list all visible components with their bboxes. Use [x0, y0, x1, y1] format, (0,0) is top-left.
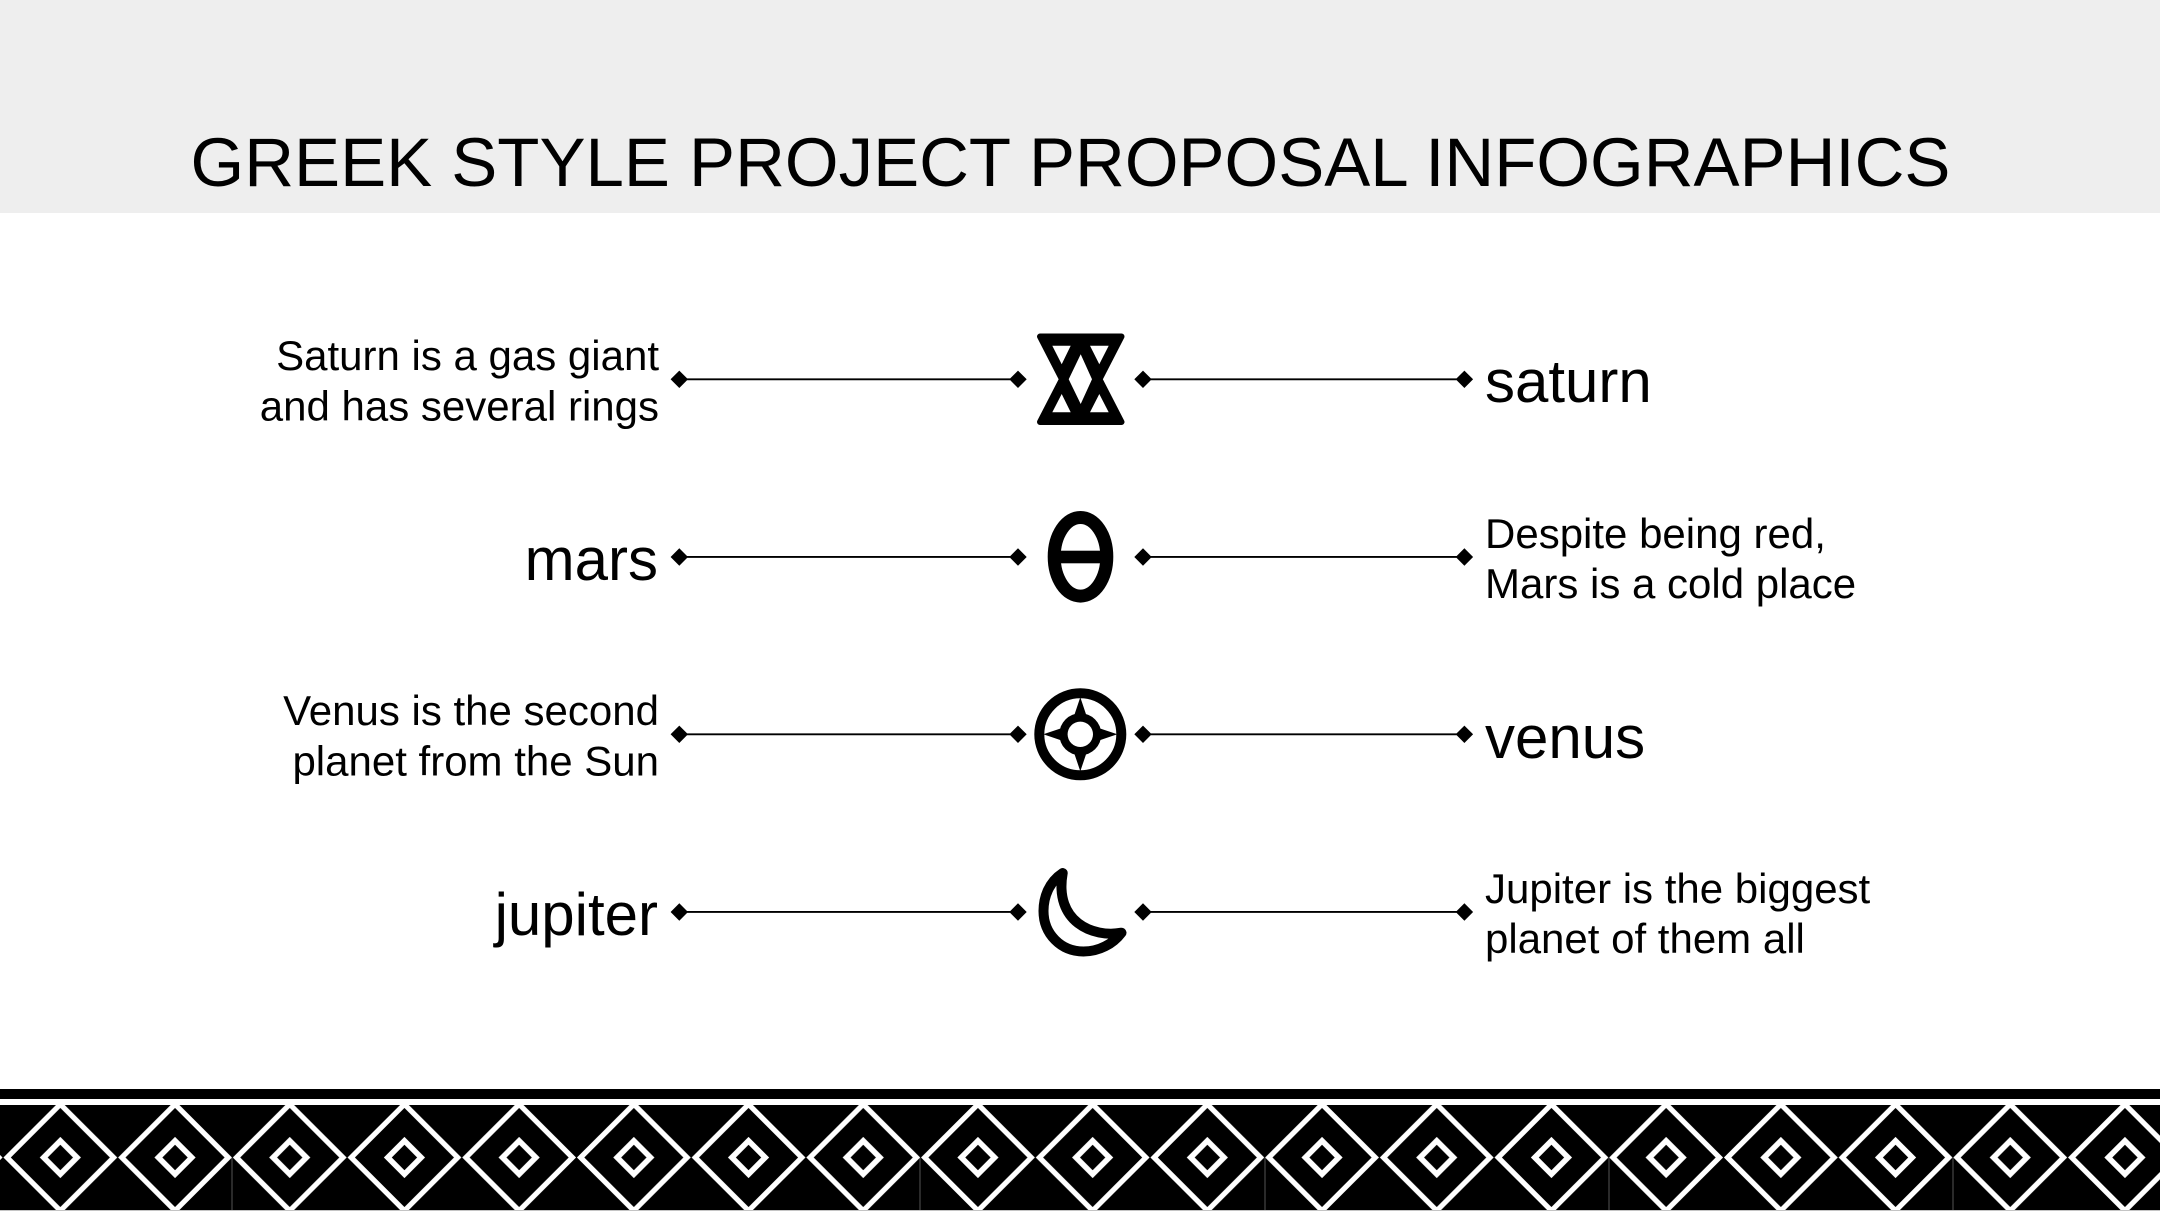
connector left: saturn	[671, 371, 1027, 388]
connector right: jupiter	[1134, 903, 1473, 921]
description: saturn: Saturn is a gas giant	[276, 332, 659, 379]
icon: compass	[1039, 693, 1121, 775]
description: venus: Venus is the second	[283, 687, 659, 734]
icon: crescent moon	[1044, 873, 1122, 952]
connector right: saturn	[1134, 371, 1473, 388]
description: mars: Despite being red,	[1485, 510, 1826, 557]
description: saturn: and has several rings	[260, 382, 659, 429]
connector left: venus	[671, 726, 1027, 743]
icon: theta	[1050, 518, 1111, 596]
description: venus: planet from the Sun	[292, 737, 659, 784]
label: jupiter: jupiter	[493, 881, 658, 948]
icon: hourglass	[1040, 336, 1122, 422]
connector left: jupiter	[671, 903, 1027, 921]
label: venus: venus	[1485, 704, 1645, 771]
footer bar	[0, 1089, 2160, 1099]
description: jupiter: Jupiter is the biggest	[1485, 865, 1870, 912]
header band	[0, 0, 2160, 213]
label: mars: mars	[525, 526, 658, 593]
description: jupiter: planet of them all	[1485, 915, 1805, 962]
description: mars: Mars is a cold place	[1485, 560, 1856, 607]
title: GREEK STYLE PROJECT PROPOSAL INFOGRAPHICS	[191, 124, 1950, 201]
row 3: venus	[283, 687, 1645, 784]
row 1: saturn	[260, 332, 1652, 429]
label: saturn: saturn	[1485, 348, 1652, 415]
row 2: mars	[525, 510, 1856, 607]
connector right: mars	[1134, 548, 1473, 566]
row 4: jupiter	[493, 865, 1871, 962]
connector left: mars	[671, 548, 1027, 566]
connector right: venus	[1134, 726, 1473, 743]
footer greek diamond pattern	[0, 1105, 2160, 1211]
